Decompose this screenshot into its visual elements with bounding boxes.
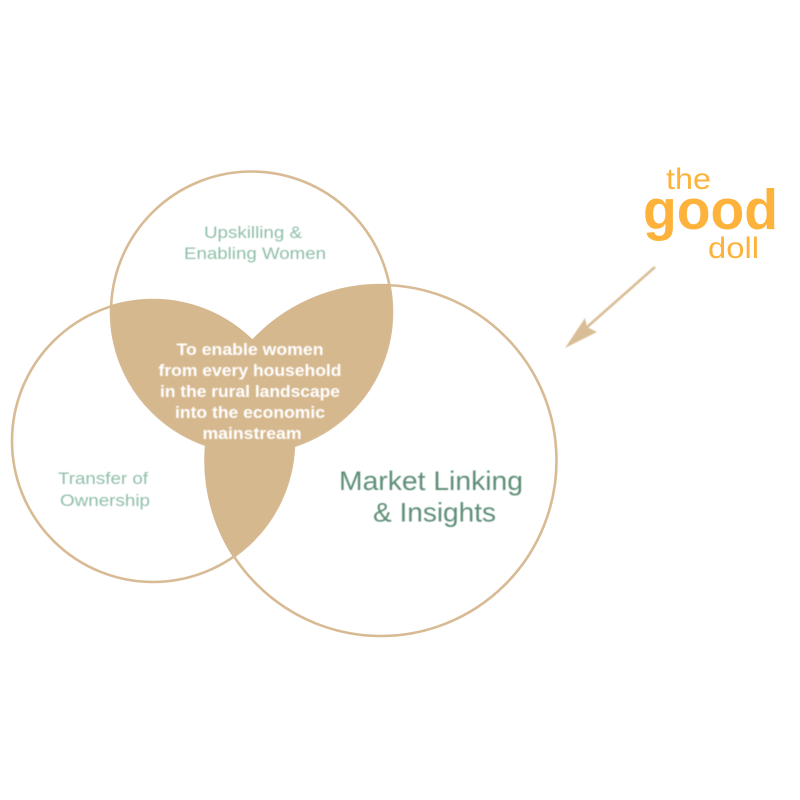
label: Market Linking & Insights bbox=[339, 466, 523, 528]
label: Upskilling & Enabling Women: Enabling Women bbox=[184, 244, 326, 263]
arrow: from logo to venn diagram bbox=[565, 267, 655, 348]
label: Transfer of Ownership: Ownership bbox=[60, 491, 150, 510]
label: central mission statement: from every household bbox=[158, 361, 342, 380]
label: Transfer of Ownership bbox=[58, 469, 150, 510]
label: central mission statement: in the rural landscape bbox=[160, 382, 340, 401]
label: Upskilling & Enabling Women: Upskilling & bbox=[204, 223, 303, 242]
circle: Transfer of Ownership bbox=[12, 300, 294, 582]
label: Market Linking & Insights: & Insights bbox=[373, 498, 496, 528]
label: central mission statement: mainstream bbox=[202, 424, 302, 443]
label: central mission statement: into the economic bbox=[175, 403, 325, 422]
label: central mission statement: To enable women bbox=[176, 340, 324, 359]
venn overlap: shared tan regions bbox=[112, 286, 391, 554]
logo: the good doll: good bbox=[643, 178, 778, 242]
circle: Market Linking & Insights bbox=[206, 285, 556, 636]
label: Transfer of Ownership: Transfer of bbox=[58, 469, 148, 488]
label: Upskilling & Enabling Women bbox=[184, 223, 326, 263]
logo: the good doll bbox=[643, 163, 778, 265]
circle: Upskilling & Enabling Women bbox=[111, 172, 392, 452]
infographic canvas bbox=[10, 168, 774, 638]
label: central mission statement bbox=[158, 340, 342, 443]
label: Market Linking & Insights: Market Linking bbox=[339, 466, 523, 496]
logo: the good doll: the bbox=[666, 163, 711, 196]
logo: the good doll: doll bbox=[708, 232, 759, 265]
